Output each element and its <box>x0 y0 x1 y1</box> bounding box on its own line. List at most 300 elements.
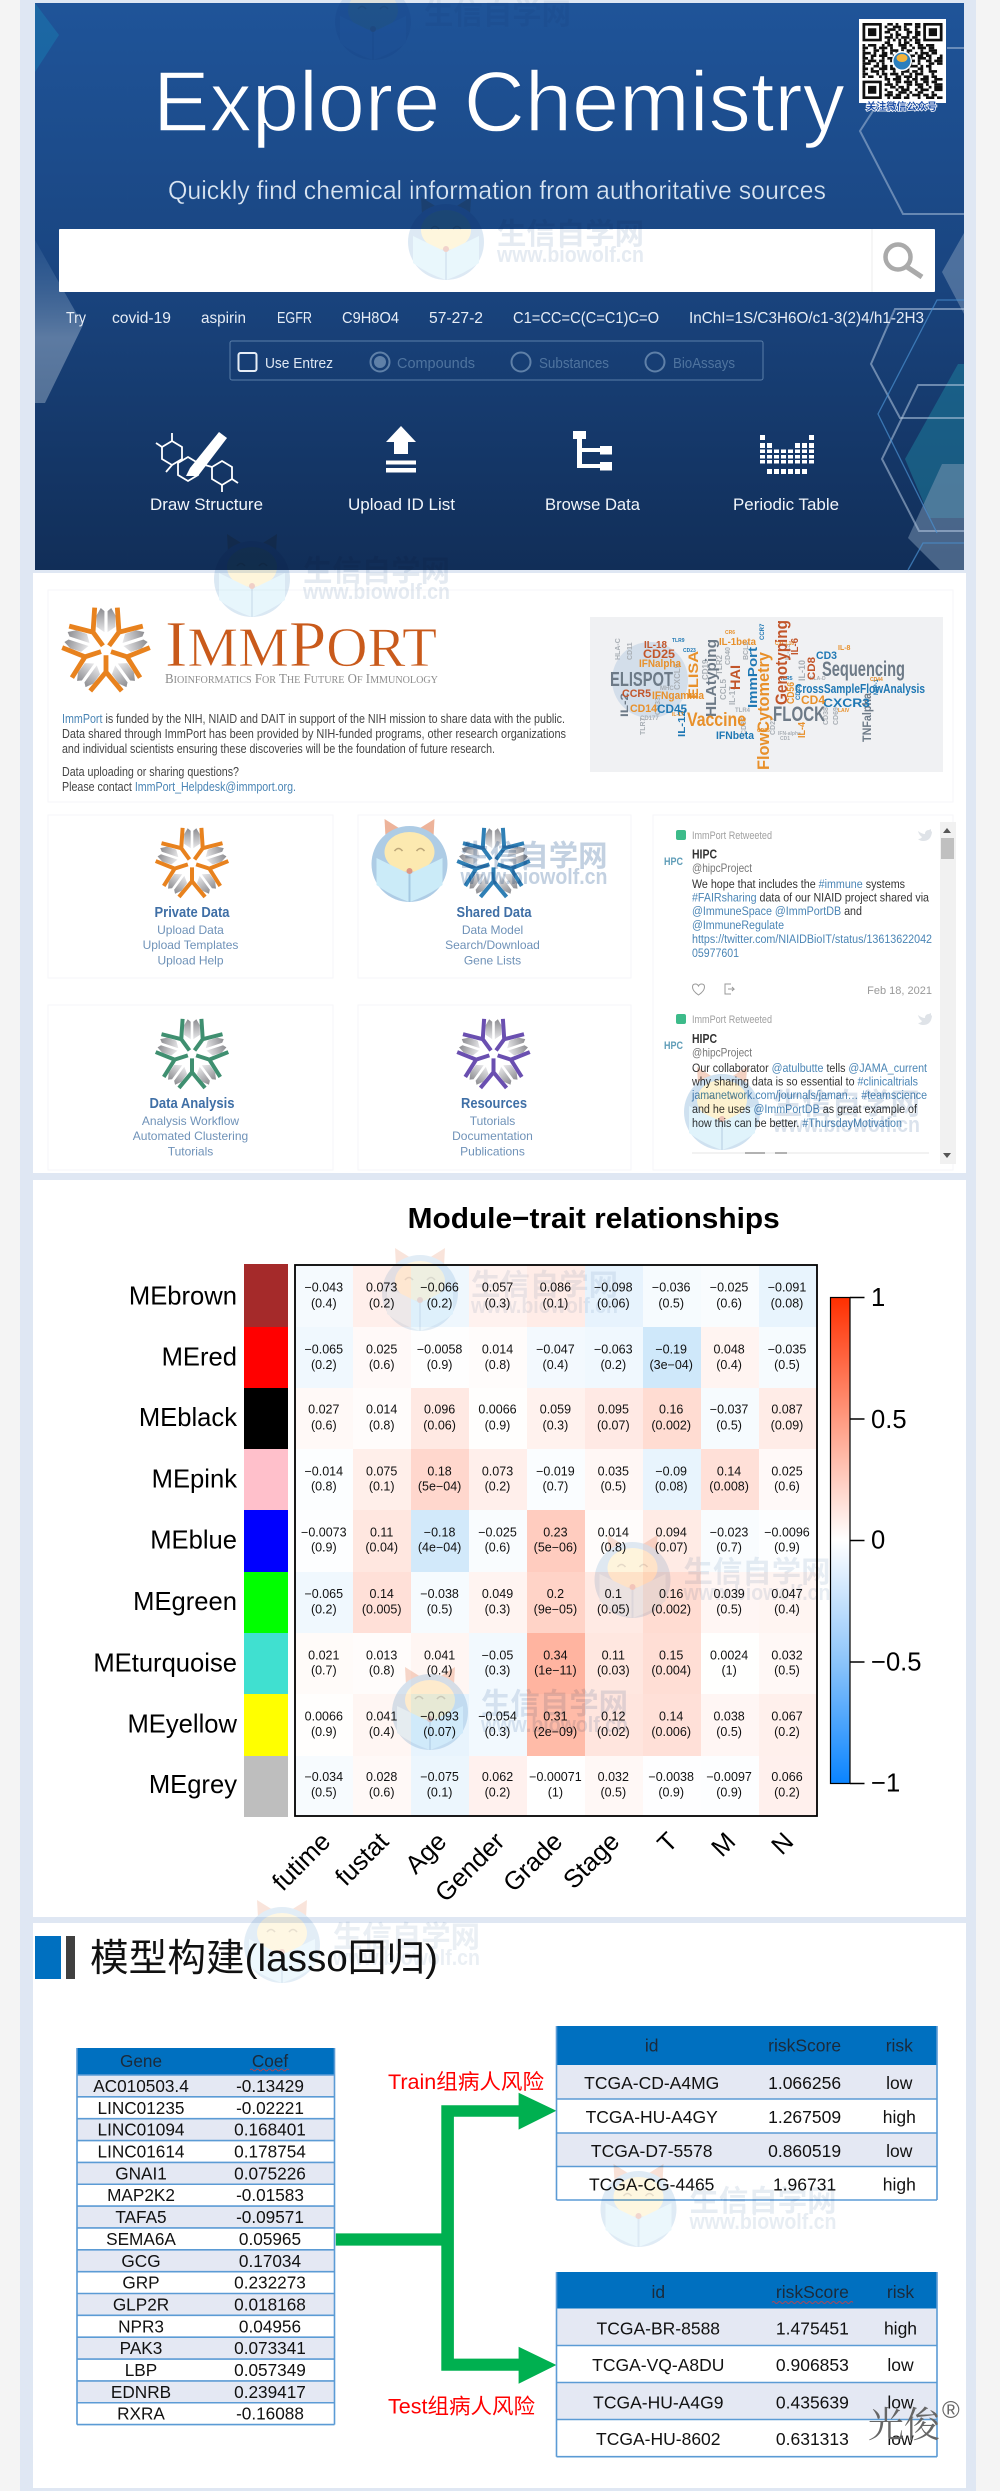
word cloud: TLR5 <box>780 676 793 682</box>
logo: ImmPort star <box>51 602 158 706</box>
search options: Use Entrez <box>265 355 333 372</box>
word cloud: CD33 <box>655 697 662 715</box>
table: gene coefficients: GCG <box>121 2251 161 2271</box>
heatmap values: (0.1) <box>427 1786 452 1800</box>
intro text: Data uploading or sharing questions? <box>62 765 239 779</box>
heatmap values: 0.049 <box>482 1587 513 1601</box>
table: train risk: low <box>886 2073 913 2093</box>
heatmap values: 0.073 <box>366 1281 397 1295</box>
section heading: 模型构建(lasso回归) <box>90 1938 438 1980</box>
heatmap values: (0.7) <box>716 1541 742 1555</box>
word cloud: ELISPOT <box>610 669 673 691</box>
search options <box>230 341 763 380</box>
heatmap values: (0.3) <box>485 1664 510 1678</box>
heatmap values: (0.4) <box>369 1725 395 1739</box>
table: gene coefficients: 0.178754 <box>234 2142 306 2162</box>
heatmap values: (0.8) <box>311 1480 337 1494</box>
heatmap values: (0.3) <box>485 1725 510 1739</box>
tweet 1: #FAIRsharing data of our NIAID project shared via <box>692 890 929 904</box>
icon: draw structure <box>156 432 238 492</box>
subtitle: Quickly find chemical information from authoritative sources <box>168 175 826 205</box>
heatmap values: 0.0066 <box>305 1710 343 1724</box>
word cloud: CD8 <box>806 657 818 680</box>
heatmap values: (0.2) <box>774 1725 800 1739</box>
word cloud: HLA-C <box>615 638 622 660</box>
table: gene coefficients: GRP <box>122 2273 160 2293</box>
word cloud: TLR2 <box>715 654 724 675</box>
heatmap values: −0.014 <box>305 1464 343 1478</box>
table: test risk: TCGA-HU-A4G9 <box>593 2392 723 2412</box>
colour legend: 1 <box>871 1284 885 1312</box>
heatmap values: 0.041 <box>424 1648 455 1662</box>
heatmap values: −0.0038 <box>648 1770 694 1784</box>
panel: ImmPort <box>33 573 966 1173</box>
heatmap values: 0.014 <box>366 1403 397 1417</box>
trait labels: Age <box>400 1827 452 1879</box>
trait labels: fustat <box>330 1827 394 1892</box>
heatmap values: (0.8) <box>369 1664 395 1678</box>
word cloud: TLR7 <box>640 717 647 735</box>
card: resources: Resources <box>461 1096 527 1112</box>
heatmap values: 0.11 <box>602 1648 625 1662</box>
heatmap values: 0.021 <box>308 1648 339 1662</box>
watermark: lasso tables <box>600 2164 836 2247</box>
heatmap values: (0.5) <box>427 1602 452 1616</box>
tweet 1: Feb 18, 2021 <box>867 985 932 997</box>
trait labels: T <box>652 1827 683 1858</box>
watermark: shared data card <box>372 819 608 902</box>
heatmap values: (0.002) <box>651 1419 691 1433</box>
heatmap values: −0.091 <box>768 1281 806 1295</box>
heatmap values: 0.067 <box>771 1710 803 1724</box>
heatmap values: (0.9) <box>485 1419 510 1433</box>
word cloud: IFNbeta <box>716 730 755 742</box>
heatmap values: 0.096 <box>424 1403 455 1417</box>
word cloud: CD44 <box>870 677 883 683</box>
heatmap values: 0.12 <box>601 1710 626 1724</box>
trait labels: Gender <box>430 1827 511 1908</box>
word cloud: CD56 <box>786 682 797 704</box>
intro text: Data shared through ImmPort has been provided by NIH-funded programs, other research organizations <box>62 727 566 741</box>
watermark: heatmap top: www.biowolf.cn <box>470 1293 618 1318</box>
table: train risk: high <box>883 2107 916 2127</box>
heatmap values: 0.14 <box>717 1464 741 1478</box>
watermark: heatmap lower: www.biowolf.cn <box>480 1712 628 1737</box>
heatmap values: 0.14 <box>370 1587 394 1601</box>
card: resources <box>358 1005 631 1170</box>
word cloud: CCR5 <box>622 688 651 700</box>
watermark: twitter feed: 生信自学网 <box>773 1088 920 1121</box>
suggestion row: EGFR <box>277 310 312 327</box>
module labels: MEpink <box>152 1465 237 1493</box>
module labels: MEblue <box>150 1526 237 1554</box>
icon: periodic table <box>760 435 814 474</box>
table: train risk: TCGA-CD-A4MG <box>584 2073 719 2093</box>
heatmap values: (0.4) <box>774 1602 800 1616</box>
table: gene coefficients: -0.01583 <box>236 2185 304 2205</box>
heatmap values: −0.065 <box>305 1342 343 1356</box>
heatmap values: 0.095 <box>598 1403 629 1417</box>
tweet 1: ImmPort Retweeted <box>692 830 772 842</box>
heatmap values: (0.5) <box>658 1297 684 1311</box>
tweet 1: @ImmuneSpace @ImmPortDB and <box>692 904 862 918</box>
table: train risk: riskScore <box>768 2036 841 2056</box>
card: data analysis: Data Analysis <box>150 1096 234 1112</box>
module colour strip <box>244 1264 288 1817</box>
watermark: heatmap top <box>382 1248 618 1331</box>
tweet 1: @hipcProject <box>692 861 753 875</box>
table: gene coefficients: AC010503.4 <box>93 2076 189 2096</box>
heatmap values: 0.31 <box>543 1710 568 1724</box>
word cloud: CD3 <box>816 650 837 662</box>
watermark: heatmap lower: 生信自学网 <box>481 1688 628 1721</box>
decorative hexagons <box>35 3 964 570</box>
heatmap values: 0.014 <box>598 1526 629 1540</box>
search options: Substances <box>539 355 609 372</box>
word cloud: LAIV <box>838 708 850 714</box>
heatmap values: −0.0096 <box>764 1526 810 1540</box>
card: resources: Tutorials <box>470 1114 515 1128</box>
heatmap values: (1) <box>548 1786 563 1800</box>
table: test risk: TCGA-VQ-A8DU <box>592 2355 724 2375</box>
table: test risk: 0.435639 <box>776 2392 849 2412</box>
wordmark: BIOINFORMATICS FOR THE FUTURE OF IMMUNOLOGY <box>165 672 438 687</box>
word cloud: IL-6 <box>790 638 801 655</box>
heatmap values: (0.2) <box>485 1786 510 1800</box>
table: gene coefficients: GNAI1 <box>115 2163 167 2183</box>
heatmap values: (0.09) <box>771 1419 803 1433</box>
watermark: hero bottom <box>214 534 450 617</box>
word cloud: CD1 <box>780 736 790 742</box>
section marker <box>35 1936 75 1979</box>
heatmap values: (0.03) <box>597 1664 630 1678</box>
signature mark: 光俊 <box>868 2397 940 2448</box>
watermark: search box: www.biowolf.cn <box>496 242 644 267</box>
word cloud: MHC <box>660 686 674 692</box>
tweet 1: 05977601 <box>692 946 739 960</box>
heatmap values: 0.057 <box>482 1281 513 1295</box>
word cloud <box>590 617 943 772</box>
heatmap values: (0.1) <box>543 1297 568 1311</box>
card: data analysis <box>48 1005 333 1170</box>
heatmap values: 0.059 <box>540 1403 571 1417</box>
word cloud: HAI <box>727 665 743 690</box>
heatmap values: −0.025 <box>478 1526 517 1540</box>
tweet 1 <box>664 829 932 997</box>
suggestion row: covid-19 <box>112 310 171 327</box>
heatmap values: (0.07) <box>423 1725 456 1739</box>
heatmap values: −0.0058 <box>417 1342 462 1356</box>
module labels: MEblack <box>139 1404 237 1432</box>
table: train risk: high <box>883 2174 916 2194</box>
table: gene coefficients: SEMA6A <box>106 2229 176 2249</box>
card: private data: Upload Help <box>157 954 224 968</box>
suggestion row <box>66 310 924 327</box>
word cloud: IFNalpha <box>639 658 682 670</box>
word cloud: Vaccine <box>687 710 746 731</box>
word cloud: CD23 <box>683 648 696 654</box>
heatmap values: −0.036 <box>652 1281 691 1295</box>
table: gene coefficients: 0.168401 <box>234 2120 306 2140</box>
heatmap values: −0.18 <box>424 1526 455 1540</box>
heatmap values: (0.6) <box>774 1480 800 1494</box>
panel: lasso model <box>33 1923 966 2488</box>
colour legend: −0.5 <box>871 1649 922 1677</box>
icon: browse tree <box>573 431 612 470</box>
heatmap values: (0.4) <box>716 1358 742 1372</box>
heatmap values: (0.3) <box>485 1297 510 1311</box>
heatmap values: 0.0066 <box>478 1403 517 1417</box>
intro text <box>62 712 566 794</box>
card: data analysis: Analysis Workflow <box>142 1114 239 1128</box>
word cloud: CD25 <box>757 728 770 734</box>
table: gene coefficients: -0.09571 <box>236 2207 304 2227</box>
suggestion row: C1=CC=C(C=C1)C=O <box>513 310 659 327</box>
tweet 2: how this can be better. #ThursdayMotivation <box>692 1116 902 1130</box>
table: train risk <box>556 2026 937 2200</box>
heatmap values: (0.5) <box>774 1358 800 1372</box>
watermark: heatmap right <box>594 1535 830 1618</box>
module labels: MEred <box>162 1344 237 1372</box>
heatmap values: (0.07) <box>655 1541 688 1555</box>
heatmap values: 0.087 <box>771 1403 803 1417</box>
label: train risk: Train组病人风险 <box>388 2071 544 2094</box>
table: gene coefficients: TAFA5 <box>115 2207 167 2227</box>
QR code: 关注微信公众号 <box>866 100 937 113</box>
colour legend: 0.5 <box>871 1406 907 1434</box>
heatmap values: (0.9) <box>427 1358 452 1372</box>
heatmap values: (0.1) <box>369 1480 395 1494</box>
heatmap values: (0.6) <box>485 1541 510 1555</box>
word cloud: CD14 <box>630 703 658 715</box>
table: gene coefficients: Gene <box>120 2051 162 2071</box>
heatmap values: 0.14 <box>659 1710 683 1724</box>
icon labels: Upload ID List <box>348 495 455 514</box>
heatmap values: −0.035 <box>768 1342 806 1356</box>
word cloud: IL-4 <box>797 722 808 738</box>
watermark: hero top <box>335 0 571 60</box>
icon: magnifier <box>886 244 922 277</box>
wordmark: IMMPORT <box>165 608 437 681</box>
heatmap values: −0.09 <box>655 1464 687 1478</box>
heatmap values: 0.014 <box>482 1342 513 1356</box>
card: private data: Private Data <box>154 905 230 921</box>
heatmap values: 0.039 <box>713 1587 745 1601</box>
heatmap values: (4e−04) <box>418 1541 461 1555</box>
heatmap values: (0.4) <box>427 1664 452 1678</box>
table: test risk: low <box>887 2392 914 2412</box>
table: gene coefficients: 0.018168 <box>234 2294 306 2314</box>
word cloud: ELISA <box>685 651 701 699</box>
heatmap title: Module−trait relationships <box>408 1203 780 1235</box>
heatmap values: 0.066 <box>771 1770 803 1784</box>
table: gene coefficients: 0.239417 <box>234 2382 306 2402</box>
QR code <box>859 19 946 113</box>
heatmap values: (0.3) <box>485 1602 510 1616</box>
word cloud: CD45 <box>657 702 687 716</box>
card: shared data: Search/Download <box>445 938 540 952</box>
table: test risk: 0.631313 <box>776 2429 849 2449</box>
table: gene coefficients: PAK3 <box>120 2338 162 2358</box>
heatmap values: (0.4) <box>311 1297 337 1311</box>
icon labels <box>150 495 839 514</box>
heatmap values: −0.034 <box>305 1770 343 1784</box>
word cloud: CD25 <box>643 647 675 661</box>
word cloud: IL-12 <box>677 709 688 737</box>
heatmap values: (0.9) <box>774 1541 800 1555</box>
card: data analysis: Tutorials <box>168 1144 213 1158</box>
heatmap values: (9e−05) <box>534 1602 577 1616</box>
watermark: heatmap top: 生信自学网 <box>471 1269 618 1302</box>
table: gene coefficients: Coef <box>252 2051 288 2071</box>
table: test risk: high <box>884 2318 917 2338</box>
card: private data <box>48 815 333 978</box>
card: resources: Documentation <box>452 1129 533 1143</box>
word cloud: CD38 <box>823 707 830 725</box>
table: test risk: TCGA-BR-8588 <box>597 2318 720 2338</box>
heatmap values: (0.3) <box>543 1419 568 1433</box>
word cloud: CD4 <box>801 693 825 707</box>
intro card <box>48 590 953 802</box>
suggestion row: aspirin <box>201 310 246 327</box>
heatmap values: 0.086 <box>540 1281 571 1295</box>
heatmap values: −0.0097 <box>706 1770 752 1784</box>
word cloud: MIP-1 <box>874 678 880 695</box>
word cloud: CCR7 <box>760 623 766 640</box>
heatmap values: (0.002) <box>651 1602 691 1616</box>
table: gene coefficients: EDNRB <box>111 2382 171 2402</box>
heatmap values: −0.063 <box>594 1342 633 1356</box>
heatmap values: (3e−04) <box>649 1358 693 1372</box>
watermark: lasso heading <box>244 1900 480 1983</box>
table: gene coefficients: MAP2K2 <box>107 2185 175 2205</box>
word cloud: FlowCytometry <box>754 651 773 770</box>
word cloud: CD40 <box>725 647 732 665</box>
watermark: lasso heading: 生信自学网 <box>333 1921 480 1954</box>
table: gene coefficients: 0.232273 <box>234 2273 306 2293</box>
table: train risk: risk <box>886 2036 913 2056</box>
heatmap values: (0.5) <box>774 1664 800 1678</box>
table: gene coefficients: -0.02221 <box>236 2098 304 2118</box>
heatmap values: (0.5) <box>600 1786 626 1800</box>
tweet 2: and he uses @ImmPortDB as great example of <box>692 1102 918 1116</box>
heatmap values: −0.075 <box>420 1770 459 1784</box>
heatmap values: 0.032 <box>598 1770 629 1784</box>
title: Explore Chemistry <box>153 55 845 150</box>
heatmap values: (0.2) <box>600 1358 626 1372</box>
table: gene coefficients: LBP <box>125 2360 157 2380</box>
table: train risk: TCGA-CG-4465 <box>589 2174 714 2194</box>
heatmap values: 0.032 <box>771 1648 803 1662</box>
watermark: lasso heading: www.biowolf.cn <box>332 1945 480 1970</box>
table: test risk: low <box>887 2429 914 2449</box>
heatmap values: 0.062 <box>482 1770 513 1784</box>
module labels: MEgreen <box>133 1588 237 1616</box>
table: train risk: 1.267509 <box>768 2107 841 2127</box>
table: gene coefficients: NPR3 <box>118 2316 164 2336</box>
heatmap values: (0.5) <box>716 1602 742 1616</box>
icon labels: Periodic Table <box>733 495 839 514</box>
word cloud: CD27 <box>770 717 777 735</box>
module labels: MEbrown <box>129 1282 237 1310</box>
heatmap values: −0.00071 <box>529 1770 582 1784</box>
heatmap values: −0.025 <box>710 1281 748 1295</box>
word cloud: ImmPort <box>745 646 760 708</box>
heatmap cells <box>295 1265 817 1816</box>
heatmap values: (0.2) <box>311 1602 337 1616</box>
heatmap values: 0.048 <box>713 1342 745 1356</box>
heatmap values: 0.15 <box>659 1648 683 1662</box>
table: train risk: TCGA-HU-A4GY <box>586 2107 718 2127</box>
module labels: MEturquoise <box>93 1649 237 1677</box>
heatmap values: 0.18 <box>427 1464 452 1478</box>
heatmap values: 0.2 <box>547 1587 564 1601</box>
table: gene coefficients: 0.04956 <box>239 2316 301 2336</box>
label: test risk: Test组病人风险 <box>388 2396 535 2419</box>
word cloud: CD69 <box>833 707 840 725</box>
word cloud: IFN-alpha <box>778 731 801 737</box>
word cloud: CD19 <box>701 659 710 680</box>
tweet 2: jamanetwork.com/journals/jaman… #teamscience <box>691 1088 927 1102</box>
table: train risk: low <box>886 2141 913 2161</box>
trait labels: N <box>766 1827 799 1860</box>
heatmap values: (0.02) <box>597 1725 630 1739</box>
word cloud: CXCR3 <box>823 696 870 710</box>
heatmap values: (0.06) <box>423 1419 456 1433</box>
heatmap values: 0.028 <box>366 1770 397 1784</box>
heatmap values: (0.9) <box>658 1786 684 1800</box>
heatmap values: (0.4) <box>543 1358 568 1372</box>
word cloud: IL-8 <box>838 645 851 652</box>
table: gene coefficients: 0.073341 <box>234 2338 306 2358</box>
heatmap values: −0.038 <box>420 1587 459 1601</box>
heatmap values: 0.16 <box>659 1587 683 1601</box>
table: gene coefficients: -0.16088 <box>236 2404 304 2424</box>
tweet 1: HIPC <box>692 846 717 862</box>
table: train risk: 0.860519 <box>768 2141 841 2161</box>
tweet 2: Our collaborator @atulbutte tells @JAMA_current <box>692 1061 928 1075</box>
intro text: and individual scientists ensuring these discoveries will be the foundation of future research. <box>62 742 495 756</box>
heatmap values: (0.06) <box>597 1297 630 1311</box>
heatmap frame <box>295 1265 817 1816</box>
watermark: shared data card: 生信自学网 <box>460 840 608 873</box>
heatmap values: (0.07) <box>597 1419 630 1433</box>
heatmap values: (1) <box>721 1664 737 1678</box>
watermark: lasso tables: www.biowolf.cn <box>689 2209 836 2234</box>
heatmap values: (0.006) <box>651 1725 691 1739</box>
watermark: shared data card: www.biowolf.cn <box>460 864 607 889</box>
module labels <box>93 1282 238 1799</box>
colour legend: −1 <box>871 1770 900 1798</box>
heatmap values: (5e−06) <box>534 1541 577 1555</box>
tweet 2: HIPC <box>692 1031 717 1046</box>
tweet 2: ImmPort Retweeted <box>692 1014 772 1026</box>
heatmap values <box>301 1281 810 1800</box>
heatmap values: (1e−11) <box>534 1664 577 1678</box>
heatmap values: 0.11 <box>370 1526 393 1540</box>
table: test risk <box>556 2272 937 2457</box>
table: gene coefficients: LINC01614 <box>98 2142 185 2162</box>
suggestion row: Try <box>66 310 86 327</box>
tweet 1: @ImmuneRegulate <box>692 918 784 932</box>
table: test risk: riskScore <box>776 2282 849 2302</box>
heatmap values: (0.9) <box>311 1725 337 1739</box>
heatmap values: 0.027 <box>308 1403 339 1417</box>
watermark: hero bottom: 生信自学网 <box>303 555 450 588</box>
tweet 2: @hipcProject <box>692 1046 753 1060</box>
heatmap values: (0.004) <box>651 1664 691 1678</box>
word cloud: CD28 <box>796 684 802 700</box>
